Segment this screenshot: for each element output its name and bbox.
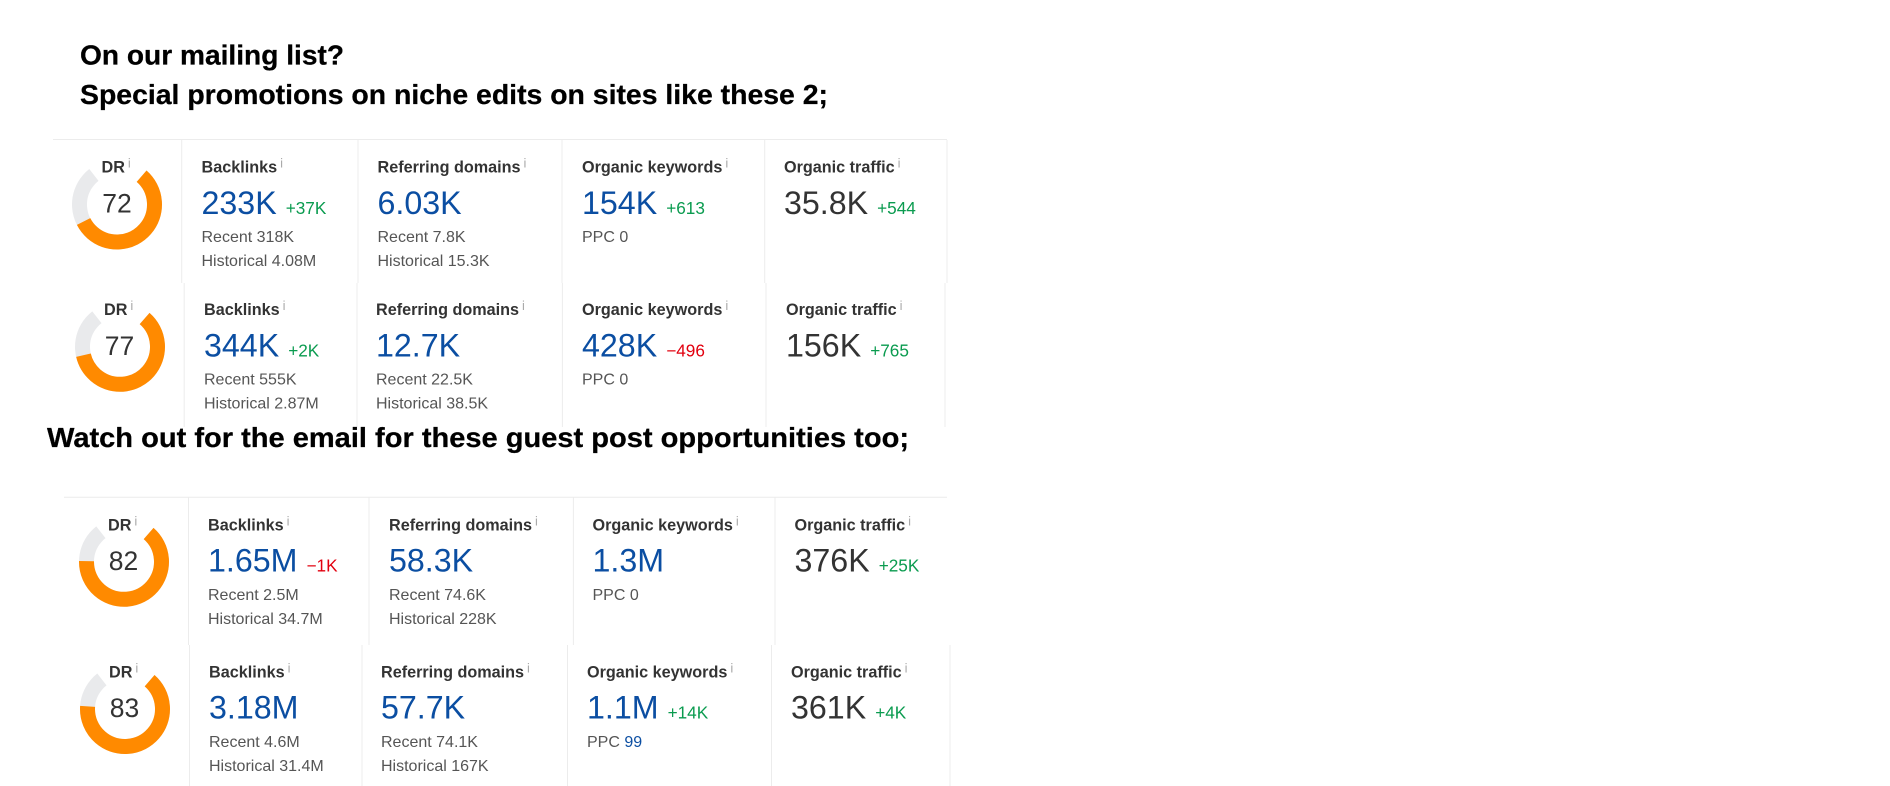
metric: referring domains: i — [535, 514, 538, 528]
donut: DR 82 — [71, 509, 177, 615]
metric: organic keywords: Organic keywords — [592, 516, 733, 534]
metric: backlinks — [209, 661, 324, 775]
metric: referring domains: i — [527, 661, 530, 676]
metric: backlinks: Historical 34.7M — [208, 611, 323, 628]
panel: site metrics row 3 — [64, 497, 947, 645]
metric: referring domains: Referring domains — [389, 516, 532, 534]
metric: organic keywords: 1.1M +14K — [587, 690, 709, 726]
donut: DR 72: i — [128, 156, 131, 171]
metric: referring domains: 57.7K — [381, 690, 466, 726]
donut: DR 82: DR — [108, 516, 131, 534]
metric: organic traffic: Organic traffic — [791, 664, 902, 682]
metric: backlinks: Backlinks — [204, 301, 280, 319]
panel: site metrics row 4 — [72, 645, 950, 786]
metric: backlinks: 1.65M −1K — [208, 542, 338, 578]
metric: referring domains: i — [524, 156, 527, 171]
metric: organic traffic — [794, 514, 920, 578]
metric: organic keywords — [582, 298, 728, 388]
metric: organic traffic: Organic traffic — [794, 516, 905, 534]
metric: referring domains: 6.03K — [378, 185, 462, 221]
metric: backlinks — [202, 156, 327, 270]
metric: organic traffic: i — [905, 661, 908, 676]
metric: organic keywords — [592, 514, 739, 604]
metric: organic keywords: Organic keywords — [582, 301, 722, 319]
metric: backlinks: i — [287, 514, 290, 528]
metric: backlinks: 233K +37K — [202, 185, 327, 221]
heading: guest post opportunities: Watch out for the email for these guest post opportunities too; — [47, 422, 909, 453]
metric: referring domains: Referring domains — [378, 159, 521, 177]
metric: organic keywords: Organic keywords — [587, 664, 727, 682]
metric: organic keywords: 1.3M — [592, 542, 664, 578]
metric: referring domains: Historical 167K — [381, 758, 489, 775]
metric: organic traffic: i — [908, 514, 911, 528]
metric: organic traffic: 361K +4K — [791, 690, 907, 726]
donut: DR 83: 83 — [110, 693, 139, 723]
metric: backlinks: Recent 555K — [204, 371, 297, 388]
metric: backlinks: Recent 4.6M — [209, 734, 300, 751]
metric: backlinks: 344K +2K — [204, 327, 320, 363]
panel: site metrics row 2 — [67, 283, 945, 427]
metric: organic keywords: Organic keywords — [582, 159, 722, 177]
donut: DR 77: i — [130, 298, 133, 313]
metric: organic keywords: PPC 0 — [592, 587, 639, 604]
metric: organic keywords: PPC 0 — [582, 371, 628, 388]
metric: backlinks: Historical 4.08M — [202, 253, 316, 270]
metric: organic traffic: Organic traffic — [784, 159, 895, 177]
metric: referring domains: Recent 7.8K — [378, 229, 466, 246]
metric: organic traffic: 376K +25K — [794, 542, 920, 578]
metric: backlinks: Backlinks — [202, 159, 277, 177]
donut: DR 83: i — [135, 661, 138, 676]
metric: referring domains: 58.3K — [389, 542, 474, 578]
donut: DR 72: DR — [102, 159, 125, 177]
metric: organic traffic — [791, 661, 908, 726]
metric: referring domains: Referring domains — [376, 301, 519, 319]
donut: DR 77: 77 — [105, 331, 134, 361]
donut: DR 83 — [72, 656, 178, 762]
donut: DR 83: DR — [109, 664, 132, 682]
metric: backlinks: i — [283, 298, 286, 313]
donut: DR 72: 72 — [102, 189, 132, 219]
metric: referring domains: Recent 74.6K — [389, 587, 486, 604]
metric: referring domains — [378, 156, 527, 270]
metric: organic keywords — [587, 661, 733, 751]
donut: DR 72 — [64, 152, 170, 257]
metric: backlinks: Recent 2.5M — [208, 587, 299, 604]
metric: organic keywords: i — [725, 156, 728, 171]
heading: mailing list — [80, 40, 828, 110]
metric: backlinks: Backlinks — [208, 516, 284, 534]
metric: organic traffic: i — [898, 156, 901, 171]
metric: organic keywords — [582, 156, 728, 246]
metric: organic traffic: 35.8K +544 — [784, 185, 916, 221]
metric: backlinks: i — [280, 156, 283, 171]
metric: organic keywords: i — [725, 298, 728, 313]
metric: organic traffic: i — [900, 298, 903, 313]
metric: backlinks — [204, 298, 320, 412]
metric: backlinks: Historical 2.87M — [204, 395, 319, 412]
metric: backlinks: i — [288, 661, 291, 676]
metric: referring domains: 12.7K — [376, 327, 461, 363]
metric: backlinks: 3.18M — [209, 690, 298, 726]
metric: organic keywords: PPC 0 — [582, 229, 628, 246]
metric: backlinks — [208, 514, 338, 628]
metric: organic traffic — [786, 298, 909, 363]
metric: backlinks: Recent 318K — [202, 229, 294, 246]
metric: referring domains — [381, 661, 530, 775]
heading: mailing list: Special promotions on niche edits on sites like these 2; — [80, 79, 828, 110]
metric: organic keywords: i — [736, 514, 739, 528]
donut: DR 77: DR — [104, 301, 127, 319]
metric: backlinks: Backlinks — [209, 664, 285, 682]
metric: referring domains: i — [522, 298, 525, 313]
metric: referring domains: Historical 228K — [389, 611, 497, 628]
metric: backlinks: Historical 31.4M — [209, 758, 324, 775]
metric: referring domains: Recent 74.1K — [381, 734, 478, 751]
metric: organic traffic: 156K +765 — [786, 327, 909, 363]
donut: DR 77 — [67, 294, 173, 400]
metric: referring domains: Historical 38.5K — [376, 395, 488, 412]
metric: organic keywords: 154K +613 — [582, 185, 705, 221]
metric: referring domains — [389, 514, 538, 628]
metric: organic keywords: i — [730, 661, 733, 676]
metric: organic traffic — [784, 156, 916, 221]
metric: organic keywords: 428K −496 — [582, 327, 705, 363]
donut: DR 82: i — [134, 514, 137, 528]
metric: organic traffic: Organic traffic — [786, 301, 897, 319]
panel: site metrics row 1 — [53, 140, 947, 283]
heading: mailing list: On our mailing list? — [80, 40, 344, 70]
metric: referring domains: Historical 15.3K — [378, 253, 490, 270]
metric: organic keywords: PPC 99 — [587, 734, 642, 751]
donut: DR 82: 82 — [109, 546, 138, 576]
metric: referring domains: Referring domains — [381, 664, 524, 682]
metric: referring domains: Recent 22.5K — [376, 371, 473, 388]
metric: referring domains — [376, 298, 525, 412]
